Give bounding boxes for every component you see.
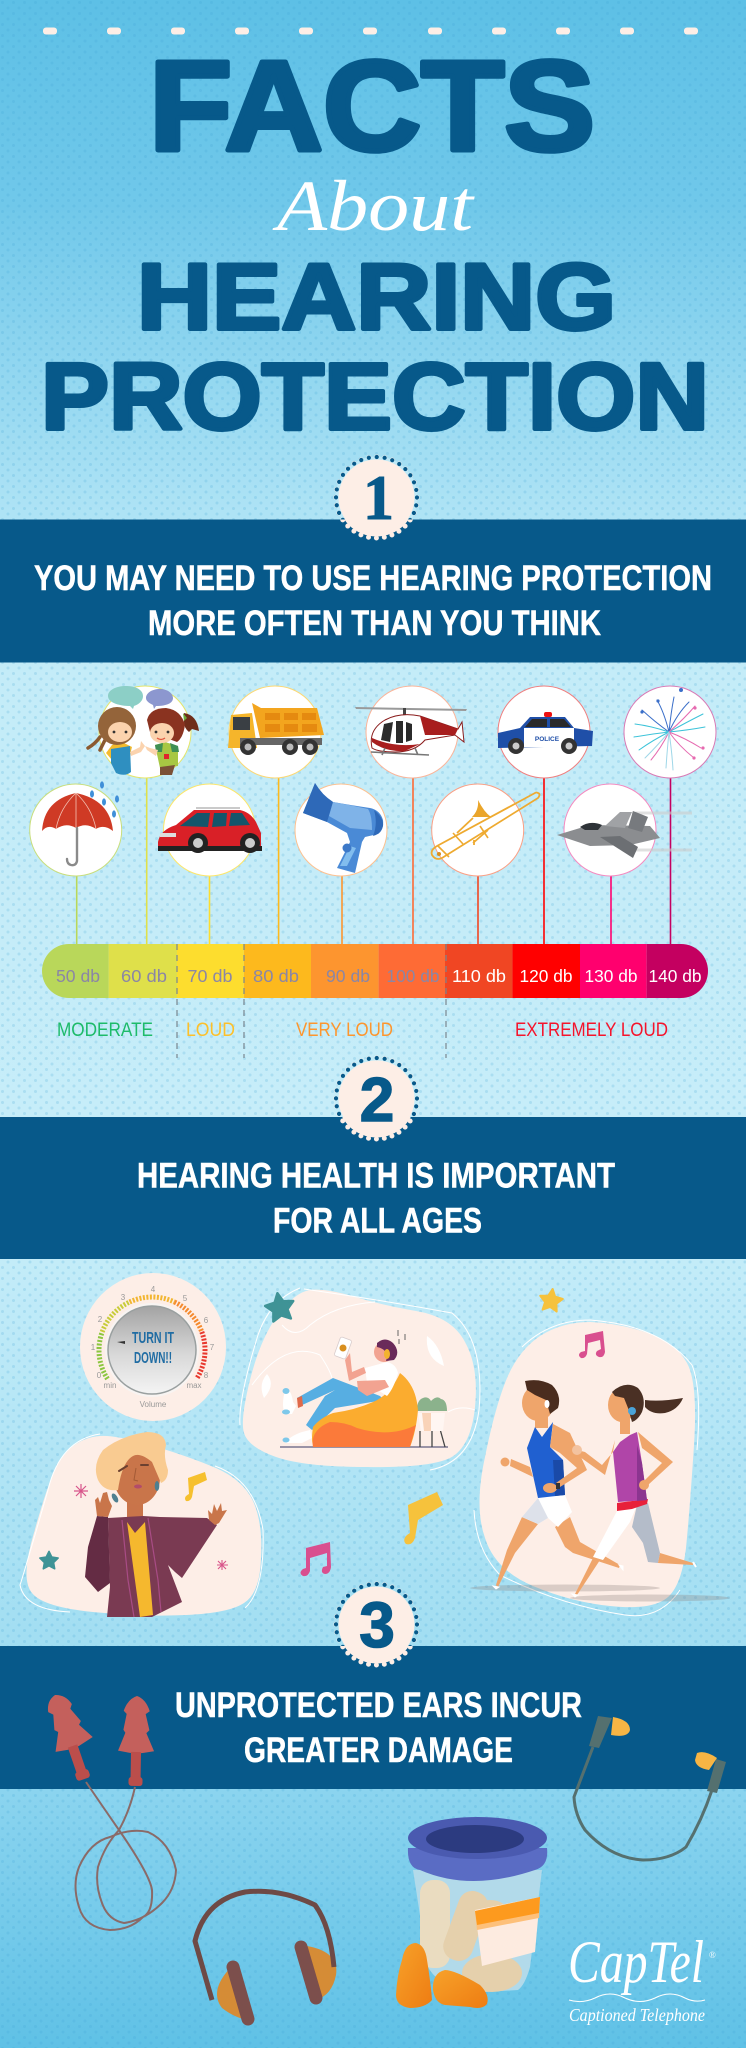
badge 1: 1	[363, 462, 394, 533]
volume dial: 8	[204, 1371, 209, 1380]
title: HEARING	[137, 244, 616, 349]
volume dial: DOWN!!	[134, 1350, 172, 1367]
volume dial: 2	[98, 1315, 103, 1324]
badge 1	[336, 456, 418, 538]
volume dial: 6	[204, 1316, 209, 1325]
icon: banded ear plugs	[574, 1716, 726, 1860]
decibel scale bar: 110 db	[452, 966, 506, 986]
badge 2: 2	[360, 1066, 394, 1135]
volume dial: 3	[121, 1293, 126, 1302]
dashed dividers	[177, 944, 446, 1058]
panel: runners	[470, 1320, 730, 1616]
icon: car	[158, 784, 262, 876]
panel: woman touching ear	[20, 1432, 263, 1617]
title: About	[272, 166, 475, 246]
badge 2	[336, 1058, 418, 1140]
icon: police car: POLICE	[535, 736, 560, 743]
icon: children talking	[88, 686, 199, 778]
icon: hair dryer	[295, 783, 387, 876]
logo: CapTel: ®	[709, 1950, 716, 1960]
loudness category labels	[57, 1019, 668, 1041]
decibel scale bar: 100 db	[386, 966, 440, 986]
icon: trombone	[432, 784, 540, 876]
badge 3	[336, 1584, 418, 1666]
decorative stars and music notes	[263, 1288, 605, 1576]
icon: earmuffs	[195, 1891, 336, 2020]
banner 3: GREATER DAMAGE	[244, 1731, 513, 1770]
decibel scale bar: 130 db	[584, 966, 638, 986]
decibel scale bar: 120 db	[520, 966, 572, 986]
banner 2	[0, 1117, 746, 1259]
volume dial: 0	[97, 1371, 102, 1380]
icon: helicopter	[355, 686, 467, 778]
badge 3: 3	[359, 1589, 395, 1661]
volume dial: 5	[183, 1294, 188, 1303]
decibel scale bar	[42, 944, 708, 998]
decorative stitched dashes	[43, 28, 698, 34]
volume dial: min	[104, 1381, 116, 1390]
decibel scale bar: 140 db	[648, 966, 702, 986]
decibel scale bar: 90 db	[326, 966, 370, 986]
decibel scale bar: 70 db	[188, 966, 232, 986]
banner 3: UNPROTECTED EARS INCUR	[175, 1686, 582, 1725]
loudness category labels: LOUD	[186, 1019, 235, 1041]
volume dial: max	[186, 1381, 202, 1390]
title: PROTECTION	[41, 344, 709, 450]
decibel scale bar: 80 db	[253, 966, 299, 986]
volume dial: 1	[91, 1343, 96, 1352]
volume dial: 4	[151, 1285, 156, 1294]
volume dial	[80, 1273, 226, 1421]
volume dial: 7	[210, 1343, 215, 1352]
banner 2: FOR ALL AGES	[273, 1202, 482, 1240]
logo: CapTel	[568, 1929, 716, 2025]
volume dial: Volume	[140, 1400, 167, 1409]
icon: fighter jet	[557, 784, 692, 876]
loudness category labels: VERY LOUD	[296, 1019, 393, 1041]
logo: CapTel: CapTel	[568, 1929, 704, 1995]
banner 1: MORE OFTEN THAN YOU THINK	[148, 604, 601, 643]
banner 3	[0, 1646, 746, 1789]
connector lines	[77, 778, 670, 944]
logo: CapTel: Captioned Telephone	[569, 2005, 705, 2025]
icon: corded earplugs	[38, 1688, 176, 1930]
banner 2: HEARING HEALTH IS IMPORTANT	[137, 1156, 615, 1196]
loudness category labels: EXTREMELY LOUD	[515, 1019, 668, 1041]
icon: fireworks	[624, 686, 716, 778]
banner 1	[0, 520, 746, 662]
decibel scale bar: 60 db	[121, 966, 167, 986]
loudness category labels: MODERATE	[57, 1019, 153, 1041]
volume dial: TURN IT	[132, 1330, 174, 1347]
panel: woman with headphones on bean bag	[240, 1288, 480, 1470]
title: FACTS	[149, 35, 595, 178]
icon: jar of earplugs	[396, 1817, 547, 2008]
icon: police car	[498, 686, 593, 778]
title	[41, 35, 709, 450]
icon: dump truck	[228, 686, 324, 778]
icon: umbrella	[30, 781, 122, 876]
decibel scale bar: 50 db	[56, 966, 100, 986]
